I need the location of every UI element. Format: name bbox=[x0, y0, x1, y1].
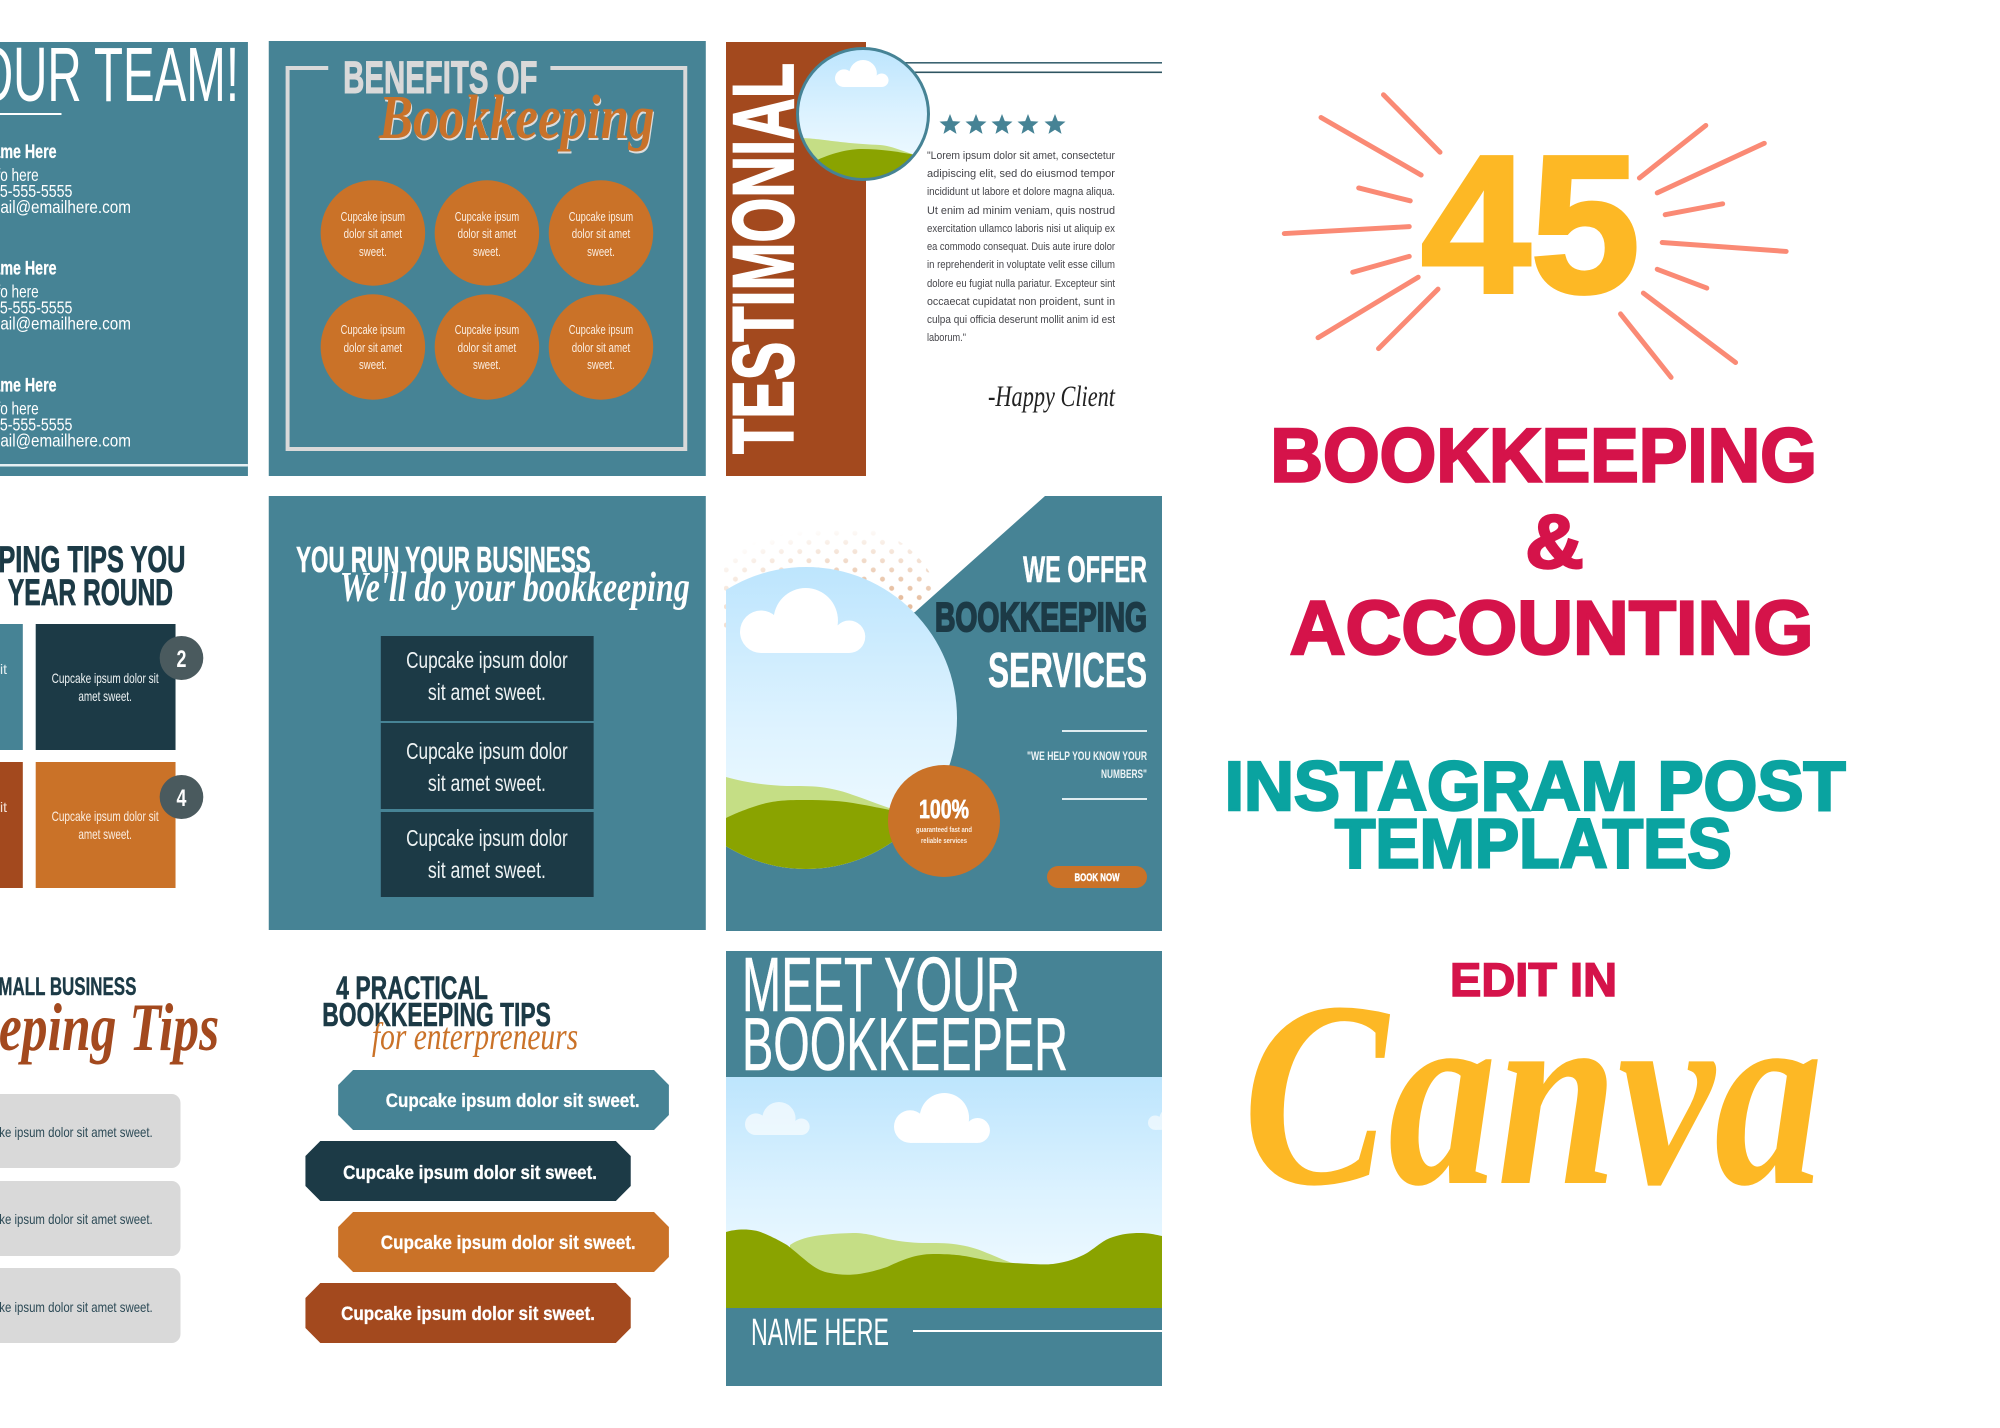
tip card 4: Cupcake ipsum dolor sit bbox=[52, 808, 159, 824]
tip bar 2 bbox=[305, 1141, 631, 1201]
title: bookkeeping and accounting: ACCOUNTING bbox=[1290, 586, 1813, 671]
benefit circle 6: sweet. bbox=[587, 357, 615, 372]
tip card 4 bbox=[36, 762, 203, 888]
benefit circle 3: sweet. bbox=[587, 244, 615, 259]
tip row 3 bbox=[0, 1268, 180, 1343]
logo text: canva: Canva bbox=[1243, 948, 1823, 1241]
benefit circle 5: Cupcake ipsum bbox=[455, 322, 519, 337]
heading: bookkeeping: BOOKKEEPING bbox=[935, 594, 1147, 640]
benefit circle 1: sweet. bbox=[359, 244, 387, 259]
panel: tips year round bbox=[0, 539, 203, 888]
signature: -Happy Client bbox=[988, 380, 1115, 413]
testimonial quote: occaecat cupidatat non proident, sunt in bbox=[927, 296, 1115, 308]
benefit circle 1: dolor sit amet bbox=[344, 226, 402, 241]
guarantee badge: guaranteed fast and bbox=[916, 825, 972, 834]
heading: services: SERVICES bbox=[988, 644, 1147, 698]
heading: 4 practical bookkeeping tips bbox=[322, 970, 551, 1033]
benefit circle 5 bbox=[435, 294, 539, 400]
testimonial quote: incididunt ut labore et dolore magna aliqua. bbox=[927, 186, 1115, 198]
tip card 2: 2 bbox=[177, 646, 186, 673]
testimonial quote: "Lorem ipsum dolor sit amet, consectetur bbox=[927, 150, 1115, 162]
tip card 4: amet sweet. bbox=[78, 826, 132, 842]
guarantee badge: 100% bbox=[919, 794, 969, 824]
service box 3: sit amet sweet. bbox=[428, 857, 546, 883]
heading: meet your bookkeeper: MEET YOUR bbox=[742, 942, 1020, 1028]
script heading: bookkeeping: Bookkeeping bbox=[378, 84, 655, 152]
title: bookkeeping and accounting: BOOKKEEPING bbox=[1270, 414, 1817, 499]
tip bar 2: Cupcake ipsum dolor sit sweet. bbox=[343, 1163, 597, 1184]
panel: small business bookkeeping tips bbox=[0, 973, 219, 1343]
tip bar 3: Cupcake ipsum dolor sit sweet. bbox=[381, 1233, 636, 1254]
tagline bbox=[1027, 749, 1147, 781]
heading: tips you bbox=[0, 539, 185, 613]
tip card 2: Cupcake ipsum dolor sit bbox=[52, 670, 159, 686]
script heading: bookkeeping: Bookkeeping bbox=[379, 86, 656, 154]
heading: 4 practical bookkeeping tips: 4 PRACTICAL bbox=[336, 970, 488, 1006]
testimonial quote: dolore eu fugiat nulla pariatur. Excepteur sint bbox=[927, 278, 1115, 290]
benefit circle 5: sweet. bbox=[473, 357, 501, 372]
service box 1 bbox=[381, 636, 594, 721]
name label: NAME HERE bbox=[751, 1312, 889, 1354]
benefit circle 1: Cupcake ipsum bbox=[341, 209, 405, 224]
tip row 1 bbox=[0, 1094, 180, 1168]
tip bar 4: Cupcake ipsum dolor sit sweet. bbox=[341, 1304, 595, 1325]
heading: benefits of: BENEFITS OF bbox=[343, 53, 538, 103]
benefit circle 3: Cupcake ipsum bbox=[569, 209, 633, 224]
heading: we offer: WE OFFER bbox=[1023, 549, 1147, 590]
tagline: NUMBERS" bbox=[1101, 767, 1147, 781]
benefit circle 2 bbox=[435, 180, 539, 286]
testimonial quote: adipiscing elit, sed do eiusmod tempor bbox=[927, 168, 1115, 180]
service box 1: Cupcake ipsum dolor bbox=[406, 647, 568, 673]
five star rating bbox=[940, 114, 1066, 134]
landscape scene bbox=[726, 1077, 1190, 1308]
landscape circle bbox=[726, 567, 957, 869]
panel: you run your business bbox=[269, 496, 706, 930]
heading: 4 practical bookkeeping tips: BOOKKEEPING TIPS bbox=[322, 996, 551, 1033]
tip card 2: amet sweet. bbox=[78, 688, 132, 704]
testimonial quote: Ut enim ad minim veniam, quis nostrud bbox=[927, 205, 1115, 217]
tip bar 1: Cupcake ipsum dolor sit sweet. bbox=[386, 1091, 640, 1112]
benefit circle 6: dolor sit amet bbox=[572, 340, 631, 355]
number 45: 45 bbox=[1421, 115, 1640, 334]
subtitle: instagram post templates: TEMPLATES bbox=[1335, 805, 1732, 883]
guarantee badge: reliable services bbox=[921, 836, 967, 845]
tip bar 3 bbox=[338, 1212, 669, 1272]
heading: meet your bookkeeper: BOOKKEEPER bbox=[742, 1002, 1068, 1086]
panel: our team bbox=[0, 33, 248, 476]
team member 1 bbox=[0, 142, 131, 217]
tip bar 4 bbox=[305, 1283, 631, 1343]
landscape circle bbox=[798, 48, 928, 185]
benefit circle 6: Cupcake ipsum bbox=[569, 322, 633, 337]
service box 2: sit amet sweet. bbox=[428, 770, 546, 796]
script heading: We'll do your bookkeeping bbox=[340, 565, 690, 611]
testimonial quote: ea commodo consequat. Duis aute irure dolor bbox=[927, 241, 1115, 253]
button: book now: BOOK NOW bbox=[1074, 872, 1120, 884]
panel: tips year round: it bbox=[0, 661, 7, 677]
subtitle: instagram post templates bbox=[1225, 747, 1846, 883]
benefit circle 3 bbox=[549, 180, 653, 286]
button: book now bbox=[1047, 866, 1147, 888]
testimonial quote: laborum." bbox=[927, 332, 966, 344]
benefit circle 1 bbox=[321, 180, 425, 286]
benefit circle 4: dolor sit amet bbox=[344, 340, 402, 355]
benefit circle 6 bbox=[549, 294, 653, 400]
testimonial quote: exercitation ullamco laboris nisi ut aliquip ex bbox=[927, 223, 1115, 235]
tip bar 1 bbox=[338, 1070, 669, 1130]
team member 2 bbox=[0, 259, 131, 334]
tip row 2 bbox=[0, 1181, 180, 1256]
burst rays bbox=[1284, 95, 1786, 377]
panel: testimonial bbox=[716, 42, 1162, 476]
benefit circle 2: sweet. bbox=[473, 244, 501, 259]
benefit circle 2: Cupcake ipsum bbox=[455, 209, 519, 224]
panel: we offer bookkeeping services bbox=[724, 496, 1162, 931]
panel: 4 practical bookkeeping tips bbox=[305, 970, 669, 1343]
script subheading: for enterpreneurs bbox=[372, 1016, 578, 1058]
service box 3 bbox=[381, 812, 594, 897]
panel: tips year round: it bbox=[0, 799, 7, 815]
team member 3 bbox=[0, 375, 131, 450]
service box 1: sit amet sweet. bbox=[428, 679, 546, 705]
panel: benefits of bookkeeping bbox=[269, 41, 706, 476]
tagline: "WE HELP YOU KNOW YOUR bbox=[1027, 749, 1147, 763]
benefit circle 4 bbox=[321, 294, 425, 400]
benefit circle 5: dolor sit amet bbox=[458, 340, 516, 355]
benefit circle 4: Cupcake ipsum bbox=[341, 322, 405, 337]
testimonial quote: culpa qui officia deserunt mollit anim id est bbox=[927, 314, 1115, 326]
service box 2 bbox=[381, 723, 594, 809]
testimonial quote: in reprehenderit in voluptate velit esse cillum bbox=[927, 259, 1115, 271]
benefit circle 3: dolor sit amet bbox=[572, 226, 631, 241]
subtitle: instagram post templates: INSTAGRAM POST bbox=[1225, 747, 1846, 825]
label: edit in: EDIT IN bbox=[1450, 953, 1617, 1006]
title: bookkeeping and accounting bbox=[1270, 414, 1817, 671]
tip card 2 bbox=[36, 624, 203, 750]
guarantee badge bbox=[888, 765, 1000, 877]
service box 3: Cupcake ipsum dolor bbox=[406, 825, 568, 851]
tip card 4: 4 bbox=[177, 785, 187, 812]
benefit circle 4: sweet. bbox=[359, 357, 387, 372]
heading: you run your business: YOU RUN YOUR BUSINESS bbox=[296, 540, 591, 580]
title: bookkeeping and accounting: & bbox=[1525, 500, 1584, 585]
heading: meet your bookkeeper bbox=[742, 942, 1068, 1086]
testimonial quote bbox=[927, 150, 1115, 344]
service box 2: Cupcake ipsum dolor bbox=[406, 738, 568, 764]
heading: tips you: YEAR ROUND bbox=[8, 572, 173, 613]
benefit circle 2: dolor sit amet bbox=[458, 226, 516, 241]
panel: meet your bookkeeper bbox=[726, 942, 1190, 1386]
